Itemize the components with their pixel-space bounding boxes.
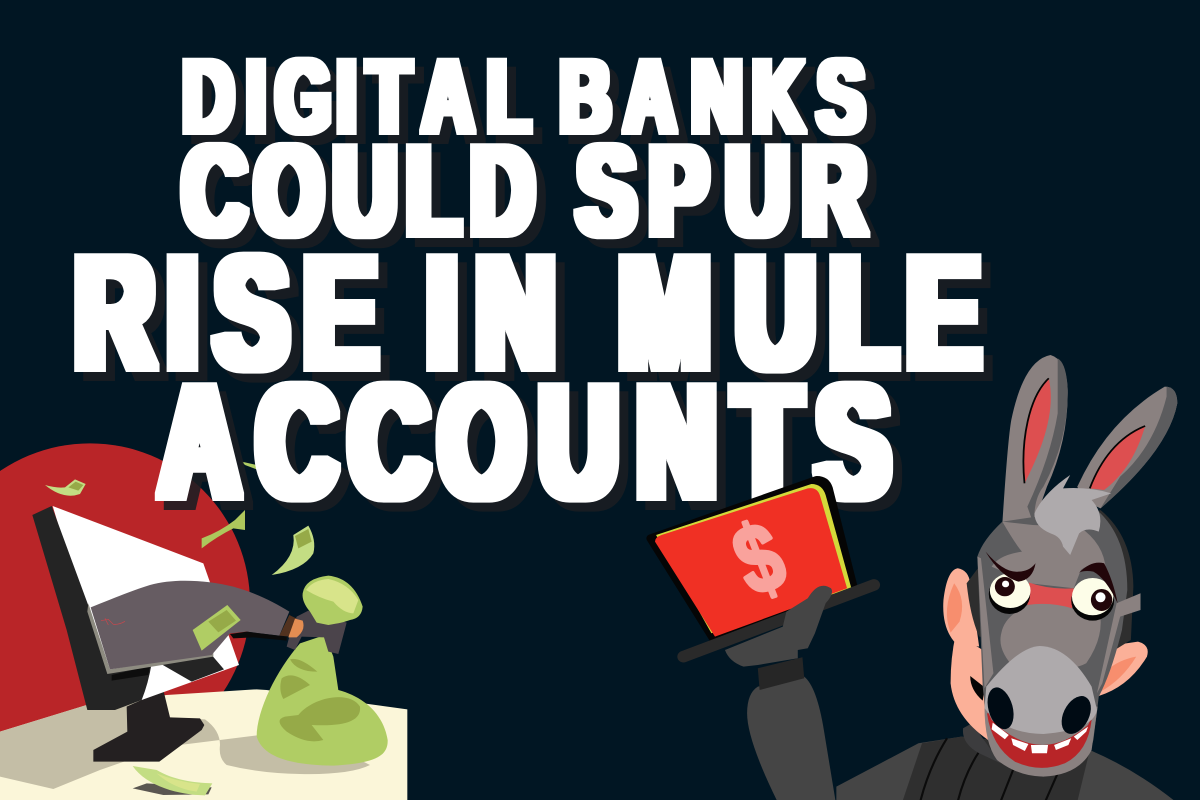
desk — [0, 689, 407, 800]
hand — [288, 619, 304, 637]
bill right — [272, 526, 314, 575]
right brow — [1079, 563, 1118, 603]
teeth — [992, 723, 1088, 753]
left inner ear line — [1023, 378, 1049, 483]
right ear — [1077, 387, 1177, 508]
bills — [45, 479, 314, 795]
monitor bezel — [32, 506, 152, 710]
bill centre — [202, 510, 245, 548]
bill on desk — [133, 766, 212, 795]
sweater — [836, 737, 1176, 800]
arm — [747, 677, 836, 800]
headline — [75, 38, 980, 532]
hand — [725, 586, 832, 667]
monitor stand — [93, 690, 204, 762]
right pupil — [1091, 589, 1112, 611]
left ear — [1002, 355, 1068, 527]
sleeve — [91, 581, 289, 669]
hood back — [967, 510, 1133, 650]
money bag — [257, 576, 388, 766]
right nostril — [1056, 692, 1097, 738]
mule head — [943, 355, 1177, 777]
left eye — [989, 573, 1031, 614]
right eye rim — [1071, 581, 1114, 621]
left brow — [986, 552, 1036, 582]
left pupil — [995, 577, 1015, 596]
hair tuft — [1034, 475, 1111, 555]
line 2: COULD SPUR — [183, 119, 866, 263]
left ear shade — [1027, 358, 1068, 527]
mask strap right — [1097, 593, 1141, 693]
bag top highlight — [306, 579, 358, 613]
bill top left — [45, 479, 86, 496]
red circle backdrop — [0, 443, 250, 763]
bill on sleeve — [193, 605, 241, 651]
arm — [87, 581, 297, 674]
red stripe — [1027, 583, 1074, 609]
line 4: ACCOUNTS — [160, 352, 889, 532]
under-arm shadow — [230, 632, 287, 641]
monitor — [32, 506, 239, 762]
bag top — [303, 576, 363, 625]
right inner ear — [1090, 426, 1145, 490]
right eye white — [1072, 578, 1113, 615]
right ear shade — [1101, 387, 1177, 508]
left glint — [1002, 581, 1009, 587]
sweater lines — [920, 738, 1058, 800]
bag knot — [287, 611, 347, 654]
turtleneck — [963, 723, 1001, 763]
screen shadow — [112, 666, 150, 681]
left nostril — [983, 685, 1018, 732]
laptop yellow edge — [656, 484, 851, 633]
cuff — [279, 615, 297, 637]
chin — [985, 707, 1098, 777]
mask head — [977, 510, 1127, 777]
dollar sign: $ — [719, 501, 799, 616]
bill on desk highlight — [157, 773, 200, 792]
illustration: arm reaching through monitor to steal money bag — [0, 443, 407, 800]
right human ear — [1099, 642, 1148, 696]
bag body — [257, 635, 388, 766]
left human ear — [943, 568, 979, 647]
illustration: mule-masked man holding laptop — [651, 355, 1177, 800]
laptop base — [684, 585, 874, 657]
right eye — [1071, 578, 1114, 621]
right inner ear — [1101, 657, 1136, 692]
mouth corner — [970, 676, 985, 701]
upper lip — [986, 707, 1097, 745]
left inner ear — [947, 583, 962, 633]
screen inner edge — [87, 603, 213, 674]
sleeve crease — [101, 618, 125, 625]
face skin — [951, 633, 988, 740]
bill patch — [295, 529, 312, 548]
monitor screen — [53, 506, 239, 700]
face centre — [1000, 604, 1101, 670]
cuff — [758, 657, 804, 690]
left eye white — [990, 573, 1031, 608]
line 1: DIGITAL BANKS — [183, 38, 865, 155]
screen dark reflection — [160, 655, 224, 682]
laptop screen — [655, 488, 847, 637]
laptop — [651, 480, 874, 657]
right glint — [1096, 592, 1106, 602]
bill shadow on desk — [133, 783, 212, 795]
mask cheek edge left — [977, 557, 993, 688]
desk shadow — [0, 700, 370, 789]
bill on sleeve patch — [208, 610, 236, 632]
muzzle — [985, 646, 1097, 734]
mouth interior — [987, 713, 1092, 768]
line 3: RISE IN MULE — [75, 223, 980, 403]
left inner ear — [1023, 378, 1051, 483]
sweater centre panel — [902, 737, 1090, 800]
right inner ear line — [1090, 426, 1145, 488]
forehead highlight — [992, 522, 1106, 588]
laptop frame — [651, 480, 853, 638]
bill top left patch — [68, 482, 83, 491]
bill under headline — [242, 462, 257, 469]
left eye rim — [989, 574, 1030, 614]
bag patches — [280, 659, 360, 741]
